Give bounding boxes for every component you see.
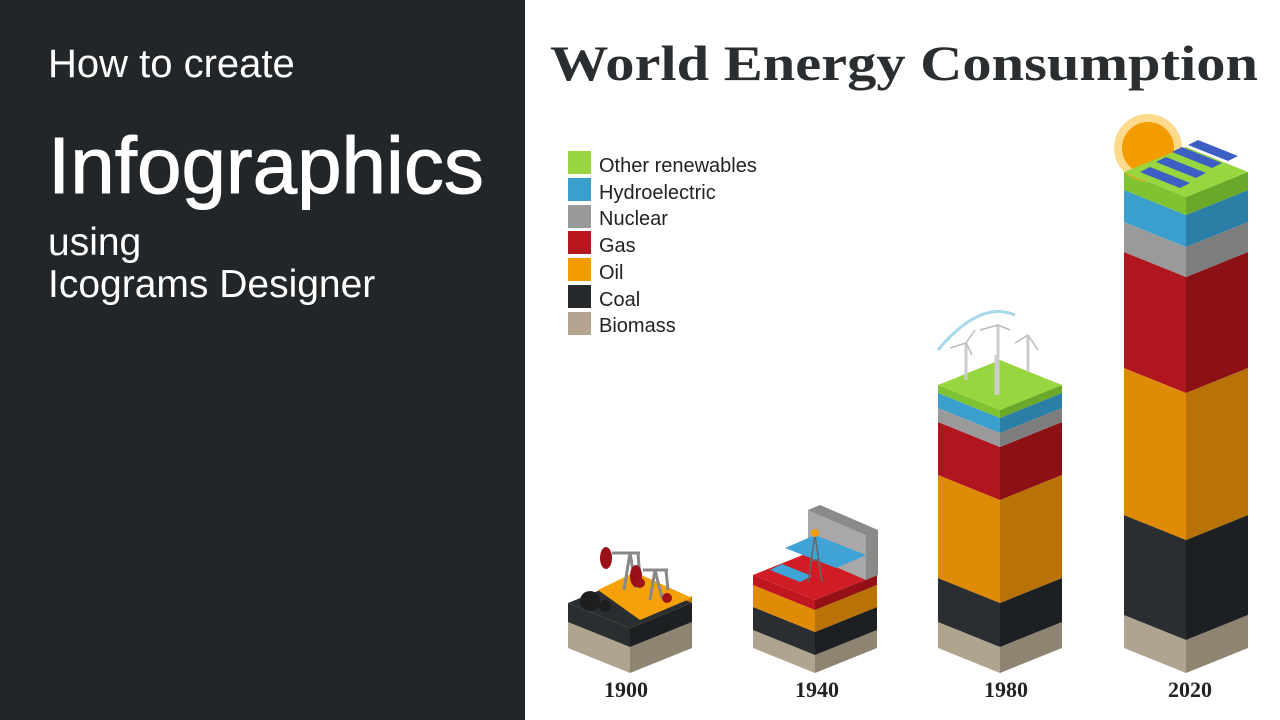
year labels: 1980 — [984, 677, 1028, 702]
legend: Oil — [599, 262, 623, 284]
legend: Hydroelectric — [599, 182, 716, 204]
text: using Icograms Designer: Icograms Designer — [48, 263, 375, 306]
column 1980 — [938, 312, 1062, 673]
column 1940 — [753, 505, 878, 673]
legend: Gas — [599, 235, 636, 257]
legend: Other renewables — [599, 155, 757, 177]
text: using Icograms Designer — [48, 221, 375, 306]
year labels: 1940 — [795, 677, 839, 702]
icon: dam — [808, 505, 878, 580]
year labels — [604, 677, 1212, 702]
column 1900 — [568, 547, 692, 673]
column 2020 — [1114, 114, 1248, 673]
legend: Nuclear — [599, 208, 668, 230]
heading: Infographics: Infographics — [48, 121, 484, 210]
year labels: 2020 — [1168, 677, 1212, 702]
text: using Icograms Designer: using — [48, 221, 141, 264]
icon: pumpjacks — [612, 553, 668, 600]
icon: sun — [1114, 114, 1182, 182]
icon: wind turbines — [938, 312, 1015, 350]
icon: solar panels — [1140, 140, 1238, 188]
legend: Biomass — [599, 315, 676, 337]
title: World Energy Consumption — [550, 35, 1258, 91]
year labels: 1900 — [604, 677, 648, 702]
legend — [568, 151, 757, 337]
panel: left title — [0, 0, 525, 720]
legend: Coal — [599, 289, 640, 311]
text: how to create: How to create — [48, 42, 295, 86]
